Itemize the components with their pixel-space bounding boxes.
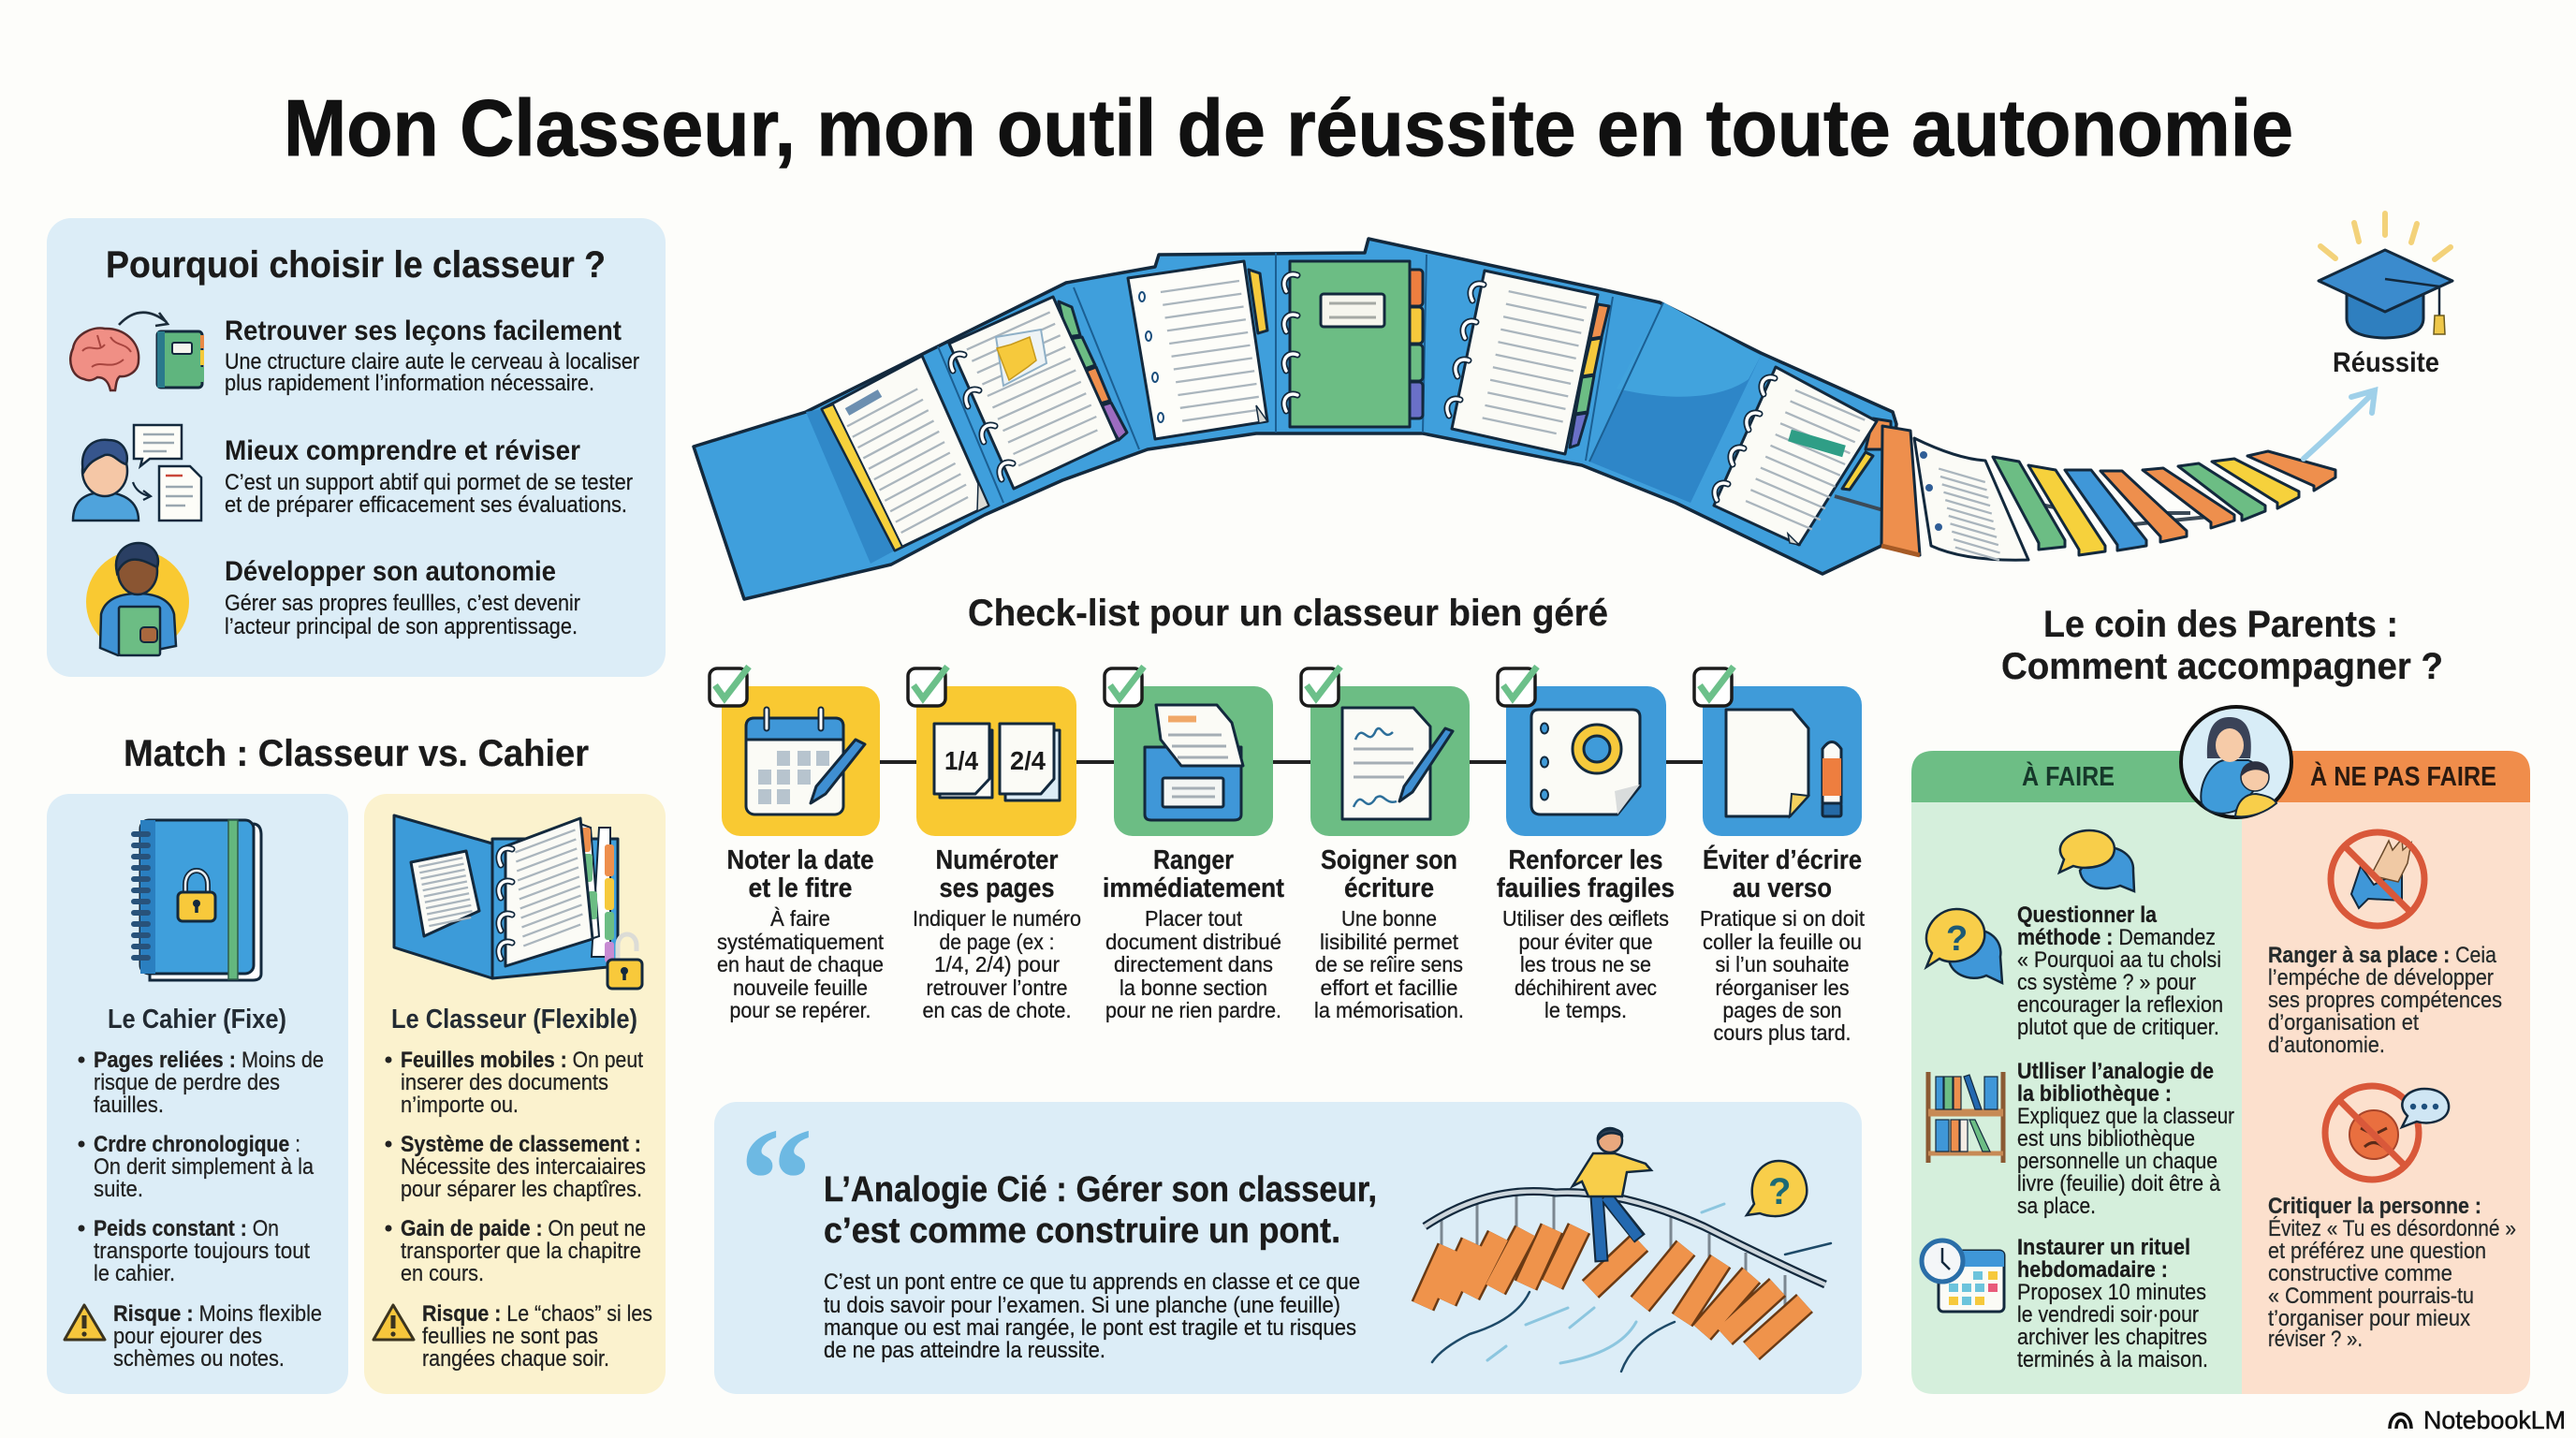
text: bibliothèque: est uns bibliothèque <box>2017 1126 2195 1152</box>
text: développer son autonomie: Gérer sas propres feullles, c’est devenir <box>225 591 580 616</box>
icon: question bubbles <box>1926 909 2002 983</box>
railing <box>1425 1191 1825 1315</box>
binder spine shading <box>806 302 1761 564</box>
text: ranger à sa place: d’organisation et <box>2268 1010 2419 1035</box>
text: questionner: cs système ? » pour <box>2017 970 2196 995</box>
icon: document in folder <box>1145 705 1243 820</box>
list: cahier: transporte toujours tout <box>94 1239 310 1264</box>
header: à faire: À FAIRE <box>2022 760 2115 792</box>
text: bibliothèque: Utlliser l’analogie de <box>2017 1059 2214 1084</box>
step 2: numéroter <box>908 667 1081 1022</box>
text: et le fitre <box>749 873 852 903</box>
check <box>1105 667 1144 706</box>
text: critiquer: constructive comme <box>2268 1261 2452 1286</box>
text: ranger à sa place: ses propres compétences <box>2268 988 2502 1013</box>
check <box>1694 667 1734 706</box>
icon: autonomous student <box>86 543 189 655</box>
sheet with yellow strip <box>822 356 988 550</box>
text: rituel: Instaurer un rituel <box>2017 1235 2190 1260</box>
icon: brain to binder <box>70 313 202 390</box>
check <box>1301 667 1340 706</box>
panel: à ne pas faire <box>2242 751 2530 1394</box>
text: questionner <box>2017 902 2223 1040</box>
text: Numéroter <box>936 845 1058 875</box>
panel: à faire <box>1911 751 2242 1394</box>
text: questionner: Questionner la <box>2017 902 2158 928</box>
text: Soigner son <box>1321 845 1457 875</box>
icon: parent and child <box>2181 707 2291 817</box>
list: cahier <box>79 1048 324 1286</box>
text: 1/4, 2/4) pour <box>934 952 1060 976</box>
list: classeur <box>386 1048 646 1286</box>
list: cahier: Peids constant : On <box>94 1216 279 1241</box>
text: bibliothèque: livre (feuilie) doit être à <box>2017 1171 2221 1196</box>
sheet with right tabs <box>1447 271 1609 454</box>
text: pour se repérer. <box>730 998 871 1022</box>
text: effort et facillie <box>1320 976 1458 1000</box>
label: réussite: Réussite <box>2333 347 2439 378</box>
text: questionner: « Pourquoi aa tu cholsi <box>2017 947 2221 973</box>
text: analogie: C’est un pont entre ce que tu apprends en classe et ce que <box>824 1269 1360 1295</box>
step 4: soigner <box>1301 667 1470 1022</box>
text: analogie <box>824 1269 1360 1363</box>
heading: analogie: c’est comme construire un pont. <box>824 1211 1340 1251</box>
heading: le classeur: Le Classeur (Flexible) <box>391 1005 637 1034</box>
text: questionner: encourager la reflexion <box>2017 992 2223 1018</box>
text <box>717 845 884 1022</box>
logo: notebooklm: NotebookLM <box>2423 1406 2566 1434</box>
icon: sheet and glue stick <box>1726 710 1841 816</box>
list: cahier: risque de perdre des <box>94 1070 280 1095</box>
text: développer son autonomie: l’acteur principal de son apprentissage. <box>225 614 578 639</box>
text: la bonne section <box>1120 976 1267 1000</box>
text: critiquer: t’organiser pour mieux <box>2268 1306 2470 1331</box>
text: mieux comprendre <box>225 435 633 518</box>
water <box>1432 1204 1831 1372</box>
text: bibliothèque <box>2017 1059 2234 1219</box>
text: Ranger <box>1153 845 1234 875</box>
text: retrouver l’ontre <box>927 976 1067 1000</box>
icon: student with notes <box>73 425 201 521</box>
text: critiquer: et préférez une question <box>2268 1239 2486 1264</box>
icon: graduation cap <box>2319 213 2452 338</box>
check <box>1498 667 1537 706</box>
text: ranger à sa place: d’autonomie. <box>2268 1033 2385 1058</box>
heading: analogie: L’Analogie Cié : Gérer son classeur, <box>824 1170 1377 1210</box>
text: ranger à sa place: l’empéche de développer <box>2268 965 2494 990</box>
icon: speech bubbles <box>2059 830 2134 891</box>
heading: coin des parents: Comment accompagner ? <box>2001 646 2443 687</box>
callout: risque classeur: rangées chaque soir. <box>422 1346 609 1372</box>
text: ranger à sa place <box>2268 943 2502 1058</box>
text <box>913 845 1081 1022</box>
list: classeur: n’importe ou. <box>401 1093 519 1118</box>
heading: analogie <box>824 1170 1377 1251</box>
text: écriture <box>1344 873 1434 903</box>
icon: question bubble <box>1747 1161 1807 1216</box>
heading: match: Match : Classeur vs. Cahier <box>124 733 589 774</box>
text: retrouver ses leçons: Une ctructure claire aute le cerveau à localiser <box>225 349 639 374</box>
text: rituel: Proposex 10 minutes <box>2017 1280 2206 1305</box>
text: rituel: le vendredi soir·pour <box>2017 1302 2199 1328</box>
icon: question bubbles: ? <box>1946 919 1968 959</box>
heading: pourquoi choisir: Pourquoi choisir le classeur ? <box>106 244 606 286</box>
text: questionner: méthode : Demandez <box>2017 925 2216 950</box>
callout: risque cahier: pour ejourer des <box>113 1324 262 1349</box>
text: si l’un souhaite <box>1715 952 1850 976</box>
text: rituel <box>2017 1235 2208 1372</box>
text <box>1314 845 1464 1022</box>
icon: no hand on notebook <box>2331 832 2424 926</box>
list: classeur: Système de classement : <box>401 1132 641 1157</box>
text: réorganiser les <box>1715 976 1850 1000</box>
list: cahier: suite. <box>94 1177 143 1202</box>
sheet with highlighter <box>1714 367 1891 545</box>
text: directement dans <box>1114 952 1273 976</box>
text: mieux comprendre: C’est un support abtif qui pormet de se tester <box>225 470 633 495</box>
text: ses pages <box>940 873 1054 903</box>
list: cahier: On derit simplement à la <box>94 1154 314 1180</box>
text: Placer tout <box>1145 906 1242 931</box>
callout: risque cahier <box>113 1301 322 1372</box>
icon: open binder with lock <box>394 815 642 989</box>
list: cahier: le cahier. <box>94 1261 175 1286</box>
text: critiquer: Évitez « Tu es désordonné » <box>2268 1216 2516 1241</box>
panel: pourquoi choisir le classeur <box>47 218 666 677</box>
panel: le classeur <box>364 794 666 1394</box>
text: systématiquement <box>717 930 884 954</box>
text: de page (ex : <box>940 930 1054 954</box>
binder body <box>694 239 1896 599</box>
icon: numbered pages: 1/4 <box>944 746 978 775</box>
text: rituel: hebdomadaire : <box>2017 1257 2168 1283</box>
text: fauilies fragiles <box>1497 873 1675 903</box>
callout: risque classeur: Risque : Le “chaos” si les <box>422 1301 652 1327</box>
title: Mon Classeur, mon outil de réussite en toute autonomie <box>284 84 2293 173</box>
list: cahier: fauilles. <box>94 1093 164 1118</box>
planks <box>1423 1228 1805 1351</box>
icon: bookshelf <box>1928 1072 2003 1163</box>
text: questionner: plutot que de critiquer. <box>2017 1015 2219 1040</box>
list: classeur: Gain de paide : On peut ne <box>401 1216 646 1241</box>
heading: coin des parents <box>2001 604 2443 687</box>
list: classeur: Nécessite des intercaiaires <box>401 1154 646 1180</box>
arrow to success <box>2304 390 2375 459</box>
header: à ne pas faire: À NE PAS FAIRE <box>2310 760 2496 792</box>
callout: risque cahier: schèmes ou notes. <box>113 1346 285 1372</box>
check <box>908 667 947 706</box>
icon: quote mark: “ <box>739 1098 813 1262</box>
text: déchihirent avec <box>1515 976 1657 1000</box>
loose sheet <box>1914 438 2028 561</box>
text <box>1103 845 1284 1022</box>
list: classeur: pour séparer les chaptîres. <box>401 1177 642 1202</box>
text: les trous ne se <box>1520 952 1651 976</box>
text: analogie: manque ou est mai rangée, le pont est tragile et tu risques <box>824 1315 1356 1341</box>
text: À faire <box>770 906 830 931</box>
text: analogie: de ne pas atteindre la reussite. <box>824 1338 1105 1363</box>
text: pour ne rien pardre. <box>1105 998 1281 1022</box>
text: de se reîire sens <box>1315 952 1463 976</box>
text: rituel: terminés à la maison. <box>2017 1347 2208 1372</box>
heading: check-list: Check-list pour un classeur bien géré <box>968 593 1608 634</box>
text: bibliothèque: la bibliothèque : <box>2017 1081 2172 1107</box>
icon: calendar and pencil <box>746 710 865 814</box>
list: classeur: en cours. <box>401 1261 484 1286</box>
heading: le cahier: Le Cahier (Fixe) <box>108 1005 286 1034</box>
sheet with yellow folder and tabs <box>949 297 1127 489</box>
list: classeur: inserer des documents <box>401 1070 608 1095</box>
text: critiquer: réviser ? ». <box>2268 1327 2363 1352</box>
icon: numbered pages <box>934 724 1060 800</box>
text: bibliothèque: sa place. <box>2017 1194 2096 1219</box>
callout: risque classeur <box>422 1301 652 1372</box>
icon: numbered pages: 2/4 <box>1010 746 1046 775</box>
text: Une bonne <box>1341 906 1437 931</box>
icon: handwritten page and pen <box>1342 708 1453 819</box>
text: mieux comprendre: Mieux comprendre et réviser <box>225 435 580 466</box>
list: classeur: transporter que la chapitre <box>401 1239 641 1264</box>
check <box>710 667 749 706</box>
list: cahier: Crdre chronologique : <box>94 1132 300 1157</box>
text: rituel: archiver les chapitres <box>2017 1325 2207 1350</box>
text: ranger à sa place: Ranger à sa place : Ceia <box>2268 943 2496 968</box>
green divider with tabs <box>1284 261 1423 427</box>
callout: risque classeur: feullies ne sont pas <box>422 1324 598 1349</box>
text: cours plus tard. <box>1713 1020 1852 1045</box>
text: Éviter d’écrire <box>1703 844 1862 875</box>
icon: locked notebook <box>134 820 261 980</box>
connectors between steps <box>880 760 1703 764</box>
heading: coin des parents: Le coin des Parents : <box>2043 604 2398 645</box>
list: classeur: Feuilles mobiles : On peut <box>401 1048 643 1073</box>
step 3: ranger <box>1103 667 1284 1022</box>
text <box>1497 845 1675 1022</box>
text: développer son autonomie <box>225 556 580 639</box>
text: document distribué <box>1105 930 1281 954</box>
text: coller la feuille ou <box>1703 930 1862 954</box>
text: critiquer: Critiquer la personne : <box>2268 1194 2481 1219</box>
icon: warning <box>65 1305 105 1340</box>
planks: coloured row <box>1993 451 2335 555</box>
text: retrouver ses leçons: plus rapidement l’information nécessaire. <box>225 371 594 396</box>
sheet with punched holes <box>1128 261 1267 439</box>
text: critiquer: « Comment pourrais-tu <box>2268 1284 2474 1309</box>
text: nouveile feuille <box>733 976 868 1000</box>
text: en cas de chote. <box>923 998 1071 1022</box>
text: le temps. <box>1544 998 1627 1022</box>
step 6: éviter <box>1694 667 1865 1045</box>
text: analogie: tu dois savoir pour l’examen. Si une planche (une feuille) <box>824 1293 1340 1318</box>
text: au verso <box>1733 873 1832 903</box>
walker <box>1573 1128 1651 1262</box>
text: bibliothèque: personnelle un chaque <box>2017 1149 2217 1174</box>
text: immédiatement <box>1103 873 1284 903</box>
bridge cords <box>1835 496 2209 524</box>
text: bibliothèque: Expliquez que la classeur <box>2017 1104 2234 1129</box>
text: Utiliser des œiflets <box>1502 906 1669 931</box>
list: cahier: Pages reliées : Moins de <box>94 1048 324 1073</box>
plank: orange <box>1881 426 1920 555</box>
text <box>1700 844 1865 1045</box>
callout: risque cahier: Risque : Moins flexible <box>113 1301 322 1327</box>
text: retrouver ses leçons <box>225 315 639 396</box>
text: Indiquer le numéro <box>913 906 1081 931</box>
icon: question bubble: ? <box>1768 1171 1791 1212</box>
text: pour éviter que <box>1518 930 1653 954</box>
text: mieux comprendre: et de préparer efficacement ses évaluations. <box>225 492 627 518</box>
icon: warning <box>373 1305 414 1340</box>
text: la mémorisation. <box>1314 998 1464 1022</box>
text: développer son autonomie: Développer son autonomie <box>225 556 556 587</box>
step 1: noter la date <box>710 667 884 1022</box>
icon: no angry face <box>2325 1086 2449 1180</box>
text: Noter la date <box>726 845 874 875</box>
icon: sheet with eyelet <box>1531 710 1640 814</box>
step 5: renforcer <box>1497 667 1675 1022</box>
text: critiquer <box>2268 1194 2516 1352</box>
text: en haut de chaque <box>717 952 884 976</box>
text: pages de son <box>1722 998 1842 1022</box>
icon: clock and calendar <box>1922 1240 2004 1312</box>
panel: le cahier <box>47 794 348 1394</box>
text: lisibilité permet <box>1320 930 1458 954</box>
illustration: binder unfolding into bridge <box>694 239 2335 599</box>
text: Pratique si on doit <box>1700 906 1865 931</box>
panel: analogie <box>714 1098 1862 1394</box>
text: Renforcer les <box>1509 845 1662 875</box>
text: retrouver ses leçons: Retrouver ses leçons facilement <box>225 315 622 346</box>
illustration: broken bridge and walker <box>1423 1128 1831 1372</box>
